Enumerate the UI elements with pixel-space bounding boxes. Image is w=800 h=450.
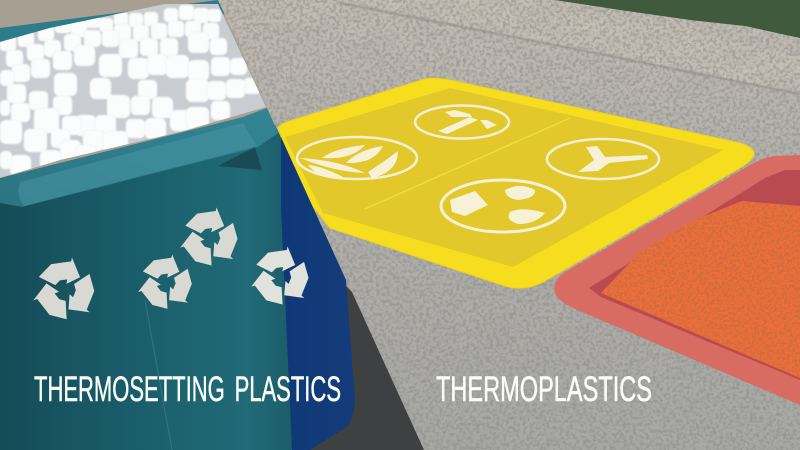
bin body [0,125,292,450]
rim handle highlight [18,123,257,206]
red tray with orange pellets [554,155,800,405]
left panel base [0,0,424,450]
curb shadow line [340,3,800,94]
bin back rim [0,0,224,42]
icon: Y shape [547,139,659,179]
icon: recycling objects [441,180,565,232]
yellow tray with icons [278,78,754,288]
tray rim [554,155,800,405]
raised curb band [320,0,800,93]
tray inner divider [365,118,570,209]
teal bin [0,0,292,450]
bin front rim [0,108,278,207]
foliage [555,0,800,38]
tray inner wall [589,170,800,380]
rim corner shadow [218,147,262,170]
tray inner face [285,88,723,267]
dark pavement strip [295,280,424,450]
blue bin [281,137,355,450]
tray rim [278,78,754,288]
recycling icon 3 [173,204,251,277]
bin body scratch lines [145,300,172,450]
label: thermoplastics: THERMOPLASTICS [436,369,652,409]
white pellet mound [0,0,280,180]
concrete texture [220,0,800,450]
recycling icon 4 [244,243,322,316]
recycling icon 2 [131,251,205,319]
icon: T shape [415,106,509,138]
icon: flame leaves [297,137,417,179]
recycling icon 1 [26,254,109,331]
orange pellets [601,201,800,378]
label: thermosetting plastics: THERMOSETTING PLASTICS [34,369,341,409]
